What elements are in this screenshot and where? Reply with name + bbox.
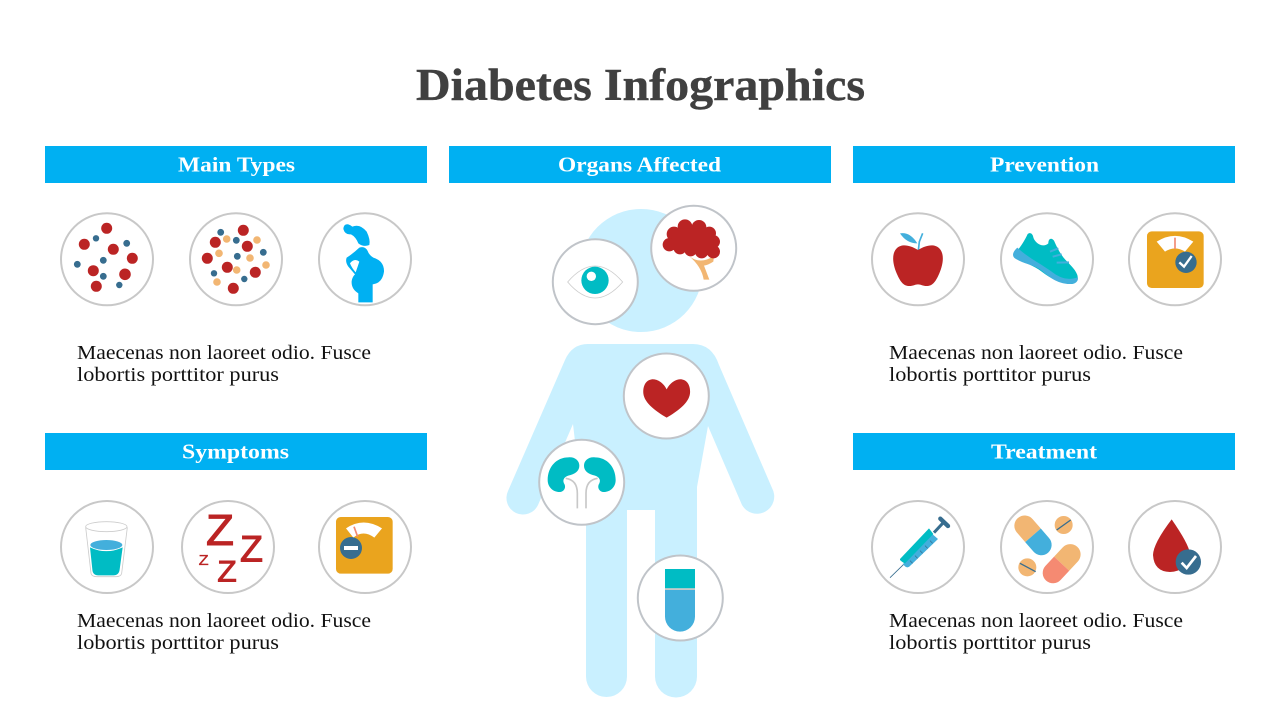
human figure silhouette: [506, 209, 774, 697]
icon: sleepiness z letters: [182, 501, 274, 593]
panel: organs affected: [449, 146, 831, 697]
text block: symptoms: [77, 610, 371, 654]
heading: symptoms: [45, 433, 427, 470]
icon: apple: [872, 213, 964, 305]
heading: main types: Main Types: [178, 152, 295, 176]
text block: symptoms: lobortis porttitor purus: [77, 632, 279, 654]
icon: kidneys: [539, 440, 624, 525]
icon: test tube: [638, 556, 723, 640]
icon: syringe: [872, 501, 964, 593]
text block: prevention: lobortis porttitor purus: [889, 364, 1091, 386]
heading: main types: [45, 146, 427, 183]
icon: type 1 blood cells: [61, 213, 153, 305]
panel: main types: [45, 146, 427, 386]
icon: scale with weight loss: [319, 501, 411, 593]
text block: treatment: lobortis porttitor purus: [889, 632, 1091, 654]
icon: type 2 blood cells: [190, 213, 282, 305]
icon: running shoe: [1001, 213, 1093, 305]
heading: treatment: [853, 433, 1235, 470]
icon: blood drop with check: [1129, 501, 1221, 593]
title: Diabetes Infographics: [416, 60, 865, 110]
text block: treatment: Maecenas non laoreet odio. Fusce: [889, 610, 1183, 632]
icon: brain: [651, 206, 736, 291]
text block: main types: [77, 342, 371, 386]
icon: pregnant woman: [319, 213, 411, 305]
icon: scale with check: [1129, 213, 1221, 305]
heading: prevention: [853, 146, 1235, 183]
icon: sleepiness z letters: Z: [199, 553, 209, 569]
icon: pills: [1001, 501, 1093, 593]
text block: prevention: [889, 342, 1183, 386]
panel: symptoms: [45, 433, 427, 654]
panel: prevention: [853, 146, 1235, 386]
text block: main types: lobortis porttitor purus: [77, 364, 279, 386]
icon: glass of water: [61, 501, 153, 593]
text block: main types: Maecenas non laoreet odio. Fusce: [77, 342, 371, 364]
text block: prevention: Maecenas non laoreet odio. Fusce: [889, 342, 1183, 364]
text block: treatment: [889, 610, 1183, 654]
heading: symptoms: Symptoms: [182, 440, 289, 464]
heading: prevention: Prevention: [990, 152, 1099, 176]
heading: treatment: Treatment: [991, 440, 1097, 464]
icon: sleepiness z letters: Z: [206, 507, 234, 555]
heading: organs affected: [449, 146, 831, 183]
heading: organs affected: Organs Affected: [558, 152, 721, 176]
icon: eye: [553, 239, 638, 324]
icon: heart: [624, 354, 709, 438]
icon: sleepiness z letters: Z: [217, 556, 237, 589]
text block: symptoms: Maecenas non laoreet odio. Fusce: [77, 610, 371, 632]
panel: treatment: [853, 433, 1235, 654]
icon: sleepiness z letters: Z: [240, 528, 263, 570]
